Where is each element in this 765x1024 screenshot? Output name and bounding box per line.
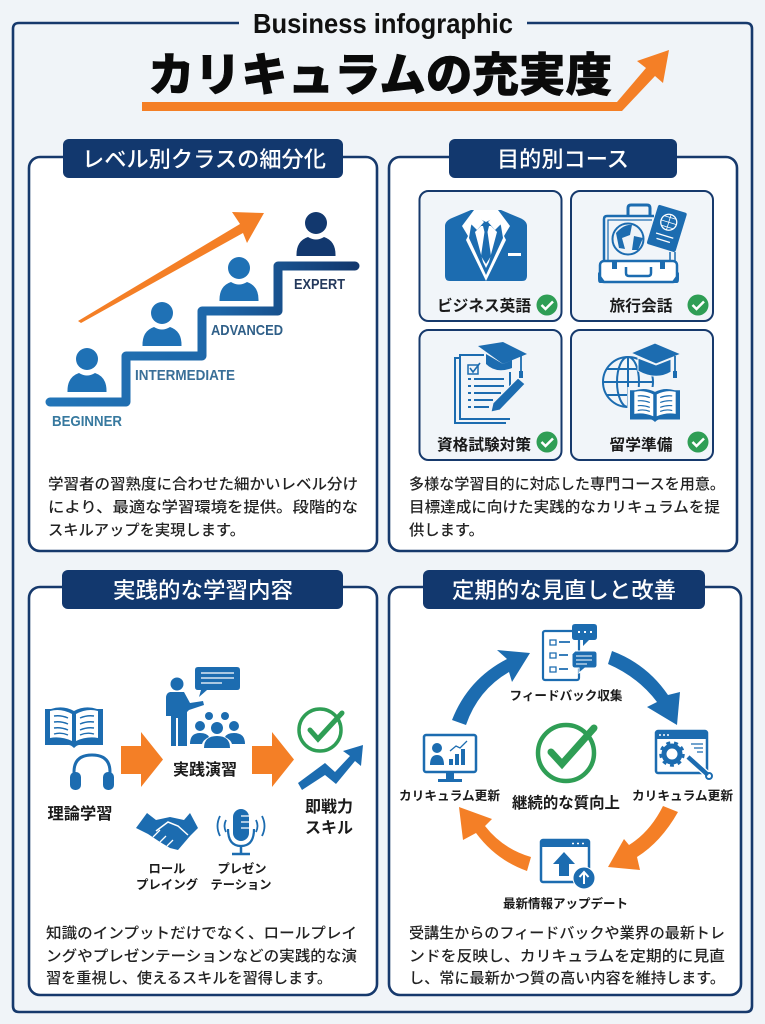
description: 学習者の習熟度に合わせた細かいレベル分け xyxy=(48,476,358,493)
panel heading: 定期的な見直しと改善 xyxy=(452,578,676,603)
label: presentation: プレゼン xyxy=(218,861,266,876)
icon: microphone xyxy=(218,809,264,854)
label: continuous improvement: 継続的な質向上 xyxy=(512,794,620,812)
label: beginner: BEGINNER xyxy=(52,413,122,430)
description xyxy=(46,925,357,987)
description: 知識のインプットだけでなく、ロールプレイ xyxy=(46,925,357,942)
icon: check circle xyxy=(299,709,342,751)
description: 目標達成に向けた実践的なカリキュラムを提 xyxy=(409,499,720,516)
panel heading: レベル別クラスの細分化 xyxy=(82,147,326,172)
icon: book xyxy=(45,707,103,748)
description: により、最適な学習環境を提供。段階的な xyxy=(48,498,358,516)
title underline arrow xyxy=(142,50,669,111)
icon: suit xyxy=(445,210,527,281)
person: advanced xyxy=(219,257,259,301)
icon: settings window xyxy=(656,731,712,779)
panel heading xyxy=(449,139,677,178)
icon: globe, cap and book xyxy=(603,343,683,422)
label: ready skill: 即戦力 xyxy=(305,797,353,816)
label: latest update: 最新情報アップデート xyxy=(503,896,628,911)
label: intermediate: INTERMEDIATE xyxy=(135,367,235,384)
icon: check xyxy=(536,432,558,452)
label: role play xyxy=(136,862,199,892)
panel: regular review xyxy=(389,570,741,995)
label: advanced: ADVANCED xyxy=(211,322,283,339)
label: 留学準備 xyxy=(610,435,673,454)
icon: feedback xyxy=(543,624,597,680)
description: し、常に最新かつ質の高い内容を維持します。 xyxy=(409,969,725,987)
cycle arrow: top right xyxy=(608,651,680,725)
panel heading: 実践的な学習内容 xyxy=(113,578,293,603)
icon: check xyxy=(688,294,708,316)
panel: purpose courses xyxy=(389,139,737,551)
description xyxy=(409,924,725,987)
label: role play: ロール xyxy=(148,862,186,876)
icon: handshake xyxy=(136,813,198,850)
description: 多様な学習目的に対応した専門コースを用意。 xyxy=(409,475,725,493)
icon: growth arrow xyxy=(298,745,363,790)
icon: check xyxy=(688,432,708,452)
card: business english xyxy=(420,191,562,321)
eyebrow heading: Business infographic xyxy=(253,8,513,39)
label: 資格試験対策 xyxy=(437,435,531,454)
panel heading xyxy=(423,570,705,609)
panel heading: 目的別コース xyxy=(497,147,629,172)
card: study abroad xyxy=(571,330,713,460)
growth arrow xyxy=(78,212,264,323)
icon: presenter xyxy=(166,667,240,746)
label: ready skill xyxy=(305,797,353,837)
label: theory: 理論学習 xyxy=(48,804,112,823)
staircase xyxy=(50,266,355,402)
cycle arrow: bottom left xyxy=(459,807,531,871)
label: role play: プレイング xyxy=(136,877,199,892)
label: expert: EXPERT xyxy=(294,276,345,293)
panel: practical learning xyxy=(29,570,377,995)
label: 旅行会話 xyxy=(610,297,673,315)
card: exam xyxy=(420,330,562,460)
description: スキルアップを実現します。 xyxy=(48,522,245,539)
icon: update window xyxy=(541,840,595,889)
icon: center check xyxy=(538,725,594,781)
label: ビジネス英語 xyxy=(437,296,531,315)
description xyxy=(48,476,358,539)
cycle arrow: top left xyxy=(452,650,530,725)
description: 受講生からのフィードバックや業界の最新トレ xyxy=(409,924,725,942)
description: ングやプレゼンテーションなどの実践的な演 xyxy=(46,948,357,965)
description: 供します。 xyxy=(409,522,484,539)
label: practice: 実践演習 xyxy=(173,761,237,779)
description xyxy=(409,475,725,539)
icon: suitcase and passport xyxy=(598,204,687,283)
label: curriculum update left: カリキュラム更新 xyxy=(399,788,500,803)
arrow xyxy=(121,732,163,787)
icon: audience xyxy=(190,712,245,748)
arrow xyxy=(252,732,294,787)
icon: check xyxy=(536,294,558,316)
label: presentation: テーション xyxy=(210,878,272,892)
description: ンドを反映し、カリキュラムを定期的に見直 xyxy=(409,948,725,965)
panel heading xyxy=(63,139,343,178)
panel heading xyxy=(62,570,343,609)
icon: exam sheet and cap xyxy=(455,342,527,423)
label: ready skill: スキル xyxy=(305,820,353,837)
person: expert xyxy=(296,212,336,256)
icon: monitor xyxy=(424,735,476,782)
label: feedback: フィードバック収集 xyxy=(510,688,623,703)
panel: level classes xyxy=(29,139,377,551)
icon: headphones xyxy=(70,755,114,790)
person: beginner xyxy=(67,348,107,392)
label: presentation xyxy=(210,861,272,892)
cycle arrow: bottom right xyxy=(608,806,678,870)
title: カリキュラムの充実度 xyxy=(148,49,612,101)
person: intermediate xyxy=(142,302,182,346)
card: travel xyxy=(571,191,713,321)
description: 習を重視し、使えるスキルを習得します。 xyxy=(46,970,332,987)
label: curriculum update right: カリキュラム更新 xyxy=(632,788,733,803)
